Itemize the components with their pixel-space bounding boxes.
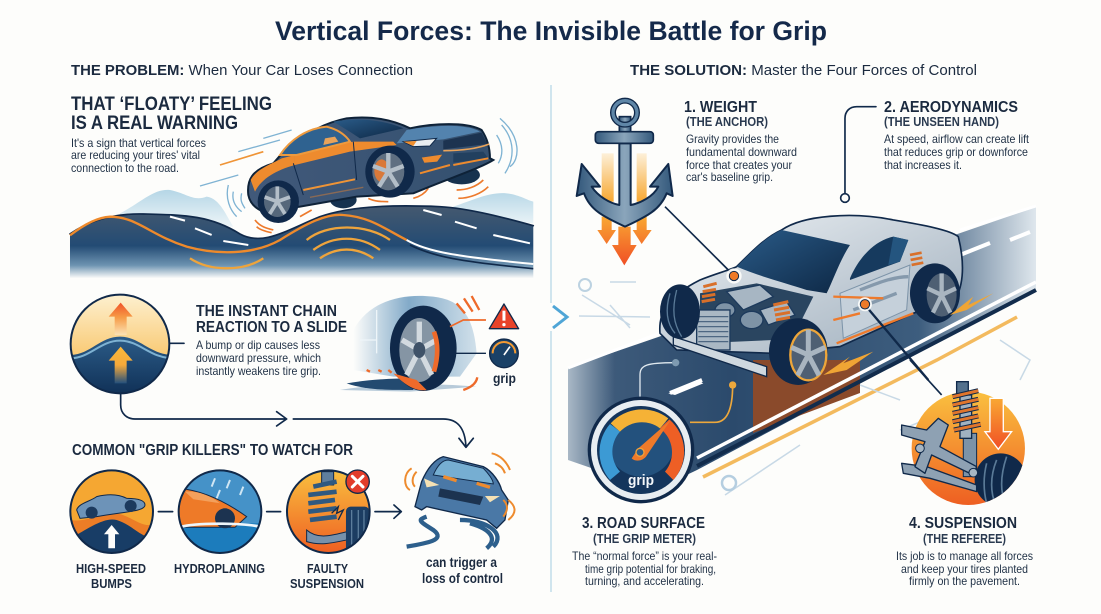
text: chain reaction description: instantly weakens tire grip. [196, 364, 321, 378]
label: loss of control [422, 555, 503, 586]
text: force 1 weight: fundamental downward [686, 145, 797, 159]
hills [120, 190, 533, 227]
sparks [823, 293, 993, 375]
illustration: anchor [577, 101, 673, 265]
wheels [660, 284, 700, 339]
illustration: road with floating car [70, 117, 533, 278]
panel: the problem [70, 62, 533, 591]
text: force 3 road surface: 3. ROAD SURFACE [582, 515, 705, 532]
label: faulty suspension: FAULTY [307, 561, 348, 576]
text: force 4 suspension [896, 515, 1033, 588]
text: force 3 road surface: turning, and accelerating. [585, 574, 704, 588]
center divider with chevron [551, 85, 567, 592]
text: force 1 weight: 1. WEIGHT [684, 99, 757, 116]
wheel scene [353, 296, 477, 377]
heading: floaty warning: IS A REAL WARNING [71, 113, 238, 134]
text: force 1 weight: car's baseline grip. [686, 170, 773, 184]
text: force 4 suspension: (THE REFEREE) [923, 531, 1006, 546]
callout lines [665, 207, 733, 275]
title: Vertical Forces: The Invisible Battle for Grip [275, 16, 827, 46]
motion lines [200, 130, 292, 186]
text: force 2 aerodynamics: (THE UNSEEN HAND) [884, 114, 999, 129]
text: floaty description [71, 136, 206, 175]
body [248, 117, 493, 212]
label: high-speed bumps [76, 561, 146, 591]
icon: warning triangle [489, 304, 519, 329]
text: force 2 aerodynamics [884, 99, 1030, 172]
heading: the solution: THE SOLUTION: Master the Four Forces of Control [630, 62, 977, 79]
springs [702, 283, 717, 302]
text: force 4 suspension: Its job is to manage all forces [896, 549, 1033, 563]
wheels [258, 180, 299, 223]
text: force 4 suspension: firmly on the pavement. [909, 574, 1020, 588]
heading: floaty warning: THAT ‘FLOATY’ FEELING [71, 94, 272, 115]
heading: instant chain reaction [196, 303, 347, 336]
text: force 2 aerodynamics: that reduces grip or downforce [884, 145, 1028, 159]
text: chain reaction description: A bump or dip causes less [196, 338, 320, 352]
illustration: suspension [902, 360, 1027, 507]
label: grip: grip [493, 370, 516, 386]
label: faulty suspension: SUSPENSION [290, 576, 364, 591]
arrow: chain to outcome [121, 394, 473, 447]
label: grip gauge: grip [628, 472, 654, 489]
panel: the solution [568, 62, 1036, 588]
text: force 4 suspension: and keep your tires planted [901, 562, 1028, 576]
text: force 2 aerodynamics: At speed, airflow can create lift [884, 132, 1030, 146]
callout line: aerodynamics [841, 107, 876, 202]
icon: car losing control [405, 453, 515, 548]
text: force 1 weight [684, 99, 797, 184]
illustration: bump circle, wheel and connectors [70, 295, 519, 557]
icon: bump circle [71, 295, 169, 393]
illustration: grip gauge [588, 359, 736, 503]
heading: the problem: THE PROBLEM: When Your Car Loses Connection [71, 62, 413, 79]
label: faulty suspension [290, 561, 364, 591]
icon: high-speed bumps [70, 470, 157, 557]
icon: faulty suspension [287, 470, 370, 553]
text: force 3 road surface: (THE GRIP METER) [593, 531, 696, 546]
heading: instant chain reaction: THE INSTANT CHAIN [196, 303, 337, 320]
text: force 1 weight: Gravity provides the [686, 132, 779, 146]
road [70, 206, 533, 278]
illustration: cutaway car [660, 207, 993, 385]
text: chain reaction description: downward pressure, which [196, 351, 321, 365]
heading: floaty warning [71, 94, 272, 134]
text: force 1 weight: force that creates your [686, 158, 792, 172]
text: force 3 road surface: time grip potential for braking, [585, 562, 716, 576]
text: force 3 road surface: The “normal force” is your real- [572, 549, 717, 563]
grip killers connectors [158, 505, 401, 518]
text: force 2 aerodynamics: 2. AERODYNAMICS [884, 99, 1018, 116]
label: loss of control: can trigger a [426, 555, 497, 570]
heading: instant chain reaction: REACTION TO A SLIDE [196, 319, 347, 336]
text: force 2 aerodynamics: that increases it. [884, 158, 962, 172]
label: high-speed bumps: BUMPS [91, 576, 132, 591]
illustration: road [568, 206, 1036, 495]
label: loss of control: loss of control [422, 571, 503, 586]
text: floaty description: are reducing your tires' vital [71, 148, 200, 162]
icon: small grip gauge [490, 339, 518, 368]
text: force 1 weight: (THE ANCHOR) [686, 114, 768, 129]
label: hydroplaning: HYDROPLANING [174, 561, 265, 576]
text: force 4 suspension: 4. SUSPENSION [909, 515, 1017, 532]
label: high-speed bumps: HIGH-SPEED [76, 561, 146, 576]
text: floaty description: connection to the road. [71, 161, 179, 175]
heading: grip killers: COMMON "GRIP KILLERS" TO WATCH FOR [72, 442, 353, 459]
text: force 3 road surface [572, 515, 717, 588]
text: chain reaction description [196, 338, 321, 378]
icon: hydroplaning [178, 470, 263, 557]
hidden wheels [330, 192, 357, 208]
text: floaty description: It's a sign that vertical forces [71, 136, 206, 150]
